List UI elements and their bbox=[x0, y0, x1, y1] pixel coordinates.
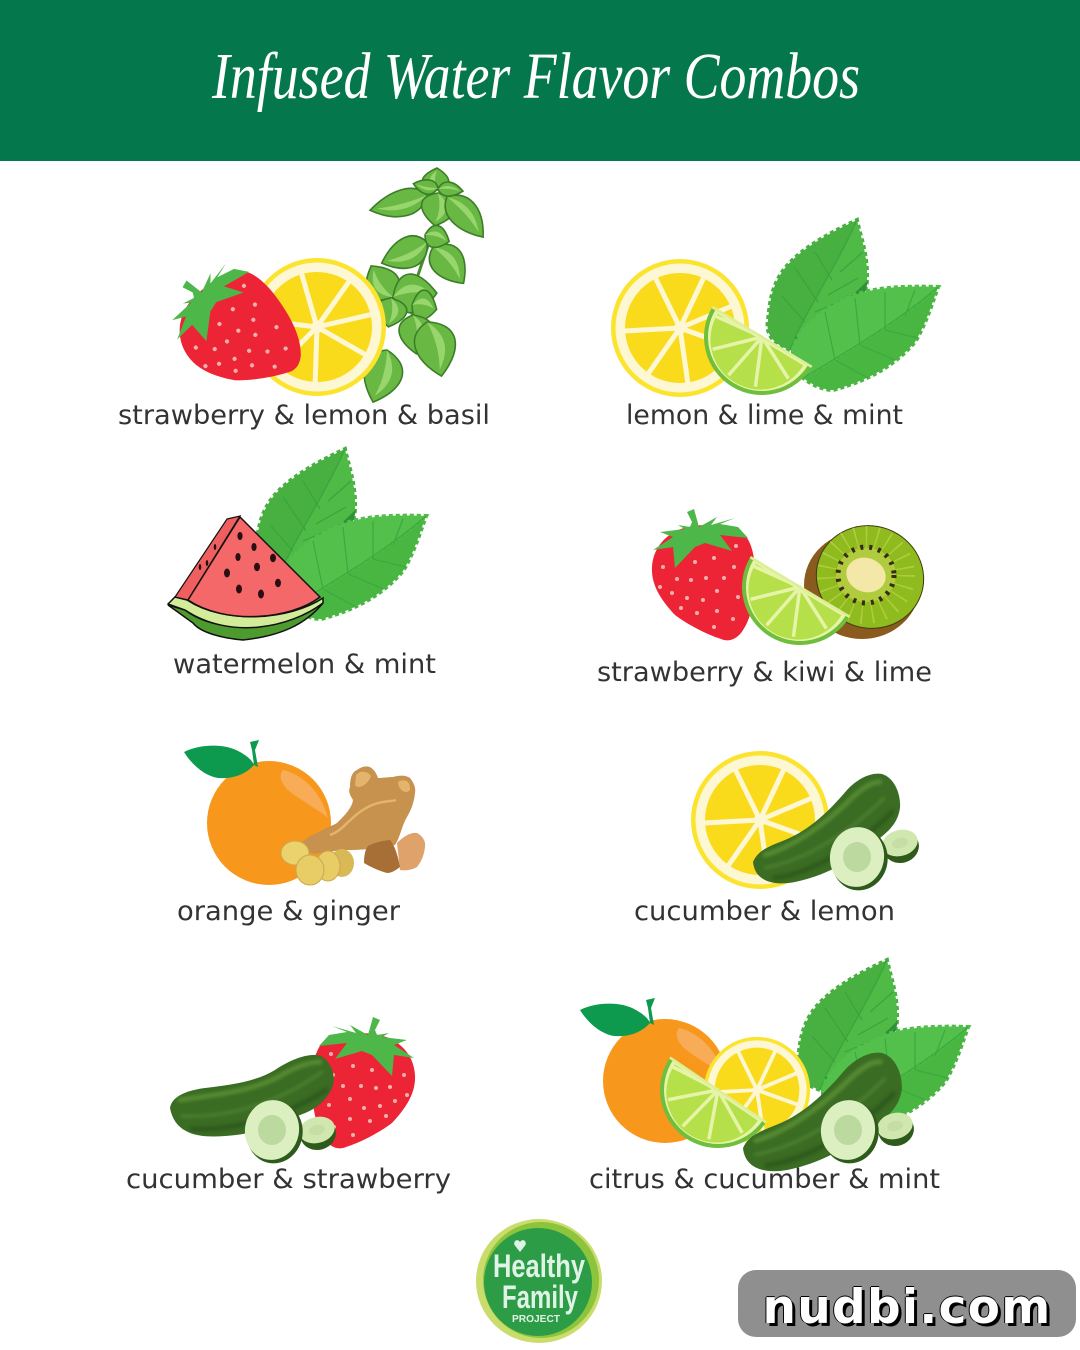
icon: lime wedge bbox=[720, 557, 850, 667]
icon: orange bbox=[580, 998, 727, 1143]
combo illustration: strawberry, lemon, basil bbox=[151, 168, 495, 415]
icon: strawberry bbox=[312, 1017, 415, 1148]
icon: cucumber bbox=[753, 774, 923, 895]
icon: lime wedge bbox=[682, 307, 812, 417]
logo: Healthy Family Project: Family bbox=[502, 1279, 578, 1315]
icon: ginger bbox=[281, 766, 425, 885]
icon: orange bbox=[184, 740, 331, 885]
icon: lemon slice bbox=[691, 751, 829, 889]
logo: Healthy Family Project: PROJECT bbox=[512, 1314, 560, 1325]
title: Infused Water Flavor Combos bbox=[211, 40, 860, 113]
icon: lemon slice bbox=[611, 259, 749, 397]
icon: mint leaves bbox=[255, 449, 426, 619]
icon: basil sprig bbox=[356, 168, 495, 408]
logo: Healthy Family Project: Healthy bbox=[493, 1248, 585, 1284]
combo illustration: citrus, cucumber, mint bbox=[580, 960, 968, 1171]
icon: mint leaves bbox=[767, 220, 938, 390]
icon: lemon slice bbox=[237, 247, 397, 407]
combo illustration: cucumber, strawberry bbox=[170, 1017, 415, 1168]
label: orange ginger: orange & ginger bbox=[177, 896, 401, 927]
combo illustration: lemon, lime, mint bbox=[611, 220, 938, 417]
icon: cucumber bbox=[743, 1053, 918, 1171]
header band bbox=[0, 0, 1080, 161]
label: cucumber strawberry: cucumber & strawberry bbox=[126, 1164, 451, 1195]
icon: strawberry bbox=[652, 509, 755, 640]
icon: mint leaves bbox=[797, 960, 968, 1130]
icon: watermelon slice bbox=[168, 516, 323, 640]
label: cucumber lemon: cucumber & lemon bbox=[634, 896, 895, 927]
watermark badge: nudbi.com bbox=[762, 1280, 1052, 1335]
label: citrus cucumber mint: citrus & cucumber & mint bbox=[589, 1164, 940, 1195]
combo illustration: cucumber, lemon bbox=[691, 751, 923, 895]
icon: strawberry bbox=[151, 244, 317, 415]
label: strawberry lemon basil: strawberry & lemon & basil bbox=[118, 400, 490, 431]
icon: lime wedge bbox=[637, 1058, 766, 1171]
combo illustration: orange, ginger bbox=[184, 740, 425, 885]
label: lemon lime mint: lemon & lime & mint bbox=[626, 400, 903, 431]
icon: kiwi bbox=[802, 511, 938, 643]
logo: Healthy Family Project bbox=[476, 1219, 602, 1343]
label: strawberry kiwi lime: strawberry & kiwi & lime bbox=[597, 657, 932, 688]
combo illustration: watermelon, mint bbox=[168, 449, 426, 640]
icon: lemon slice bbox=[704, 1037, 810, 1143]
icon: cucumber bbox=[170, 1055, 340, 1168]
label: watermelon mint: watermelon & mint bbox=[173, 649, 436, 680]
combo illustration: strawberry, kiwi, lime bbox=[652, 509, 938, 667]
